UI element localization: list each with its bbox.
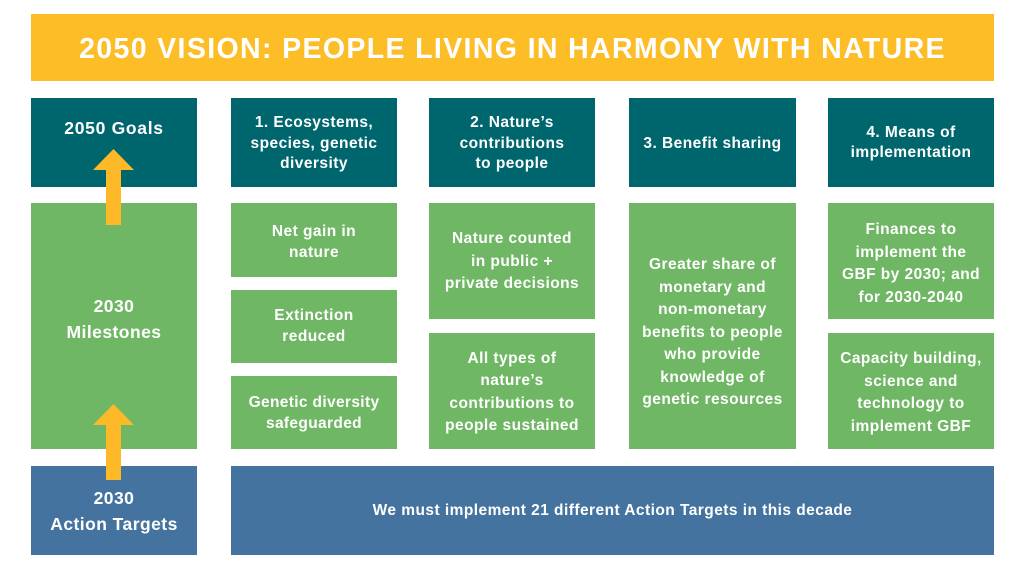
- milestone: nature counted in decisions: in public +: [471, 253, 553, 270]
- action targets statement: [231, 466, 994, 555]
- goal 1: diversity: [280, 155, 348, 172]
- row label: 2030 Milestones: [31, 203, 197, 449]
- row label: 2050 Goals: 2050 Goals: [64, 118, 164, 138]
- milestone: benefit sharing: genetic resources: [642, 391, 783, 408]
- row label: 2030 Action Targets: 2030: [94, 488, 134, 508]
- goal 4: [828, 98, 994, 187]
- arrow: targets to milestones: [93, 404, 134, 480]
- milestone: net gain in nature: nature: [289, 244, 339, 261]
- milestone: nature's contributions sustained: contributions to: [449, 394, 575, 412]
- action targets statement: We must implement 21 different Action Targets in this decade: [373, 502, 852, 519]
- milestone: extinction reduced: Extinction: [274, 307, 354, 324]
- milestone: extinction reduced: reduced: [282, 328, 346, 344]
- milestone: benefit sharing: Greater share of: [649, 256, 776, 273]
- row label: 2030 Milestones: 2030: [94, 296, 134, 316]
- milestone: finances: implement the: [856, 244, 966, 260]
- goal 1: 1. Ecosystems,: [255, 114, 373, 131]
- goal 2: to people: [476, 155, 548, 172]
- milestone: extinction reduced: [231, 290, 397, 363]
- goal 3: [629, 98, 796, 187]
- milestone: benefit sharing: benefits to people: [642, 324, 783, 341]
- row label: 2050 Goals: [31, 98, 197, 187]
- arrow: milestones to goals: [93, 149, 134, 225]
- milestone: nature counted in decisions: Nature counted: [452, 230, 572, 247]
- milestone: nature's contributions sustained: All types of: [468, 350, 556, 366]
- milestone: nature counted in decisions: private decisions: [445, 275, 579, 292]
- milestone: nature counted in decisions: [429, 203, 595, 319]
- milestone: capacity building: [828, 333, 994, 449]
- milestone: net gain in nature: [231, 203, 397, 277]
- milestone: genetic diversity safeguarded: Genetic diversity: [249, 394, 379, 411]
- milestone: capacity building: science and: [864, 372, 958, 390]
- title banner: [31, 14, 994, 81]
- row label: 2030 Milestones: Milestones: [67, 322, 161, 342]
- goal 1: species, genetic: [251, 135, 377, 152]
- milestone: nature's contributions sustained: people sustained: [445, 417, 579, 434]
- milestone: finances: for 2030-2040: [859, 288, 963, 306]
- row label: 2030 Action Targets: Action Targets: [50, 514, 178, 534]
- goal 4: implementation: [851, 144, 971, 161]
- milestone: nature's contributions sustained: [429, 333, 595, 449]
- title banner: 2050 VISION: PEOPLE LIVING IN HARMONY WITH NATURE: [79, 33, 946, 65]
- milestone: benefit sharing: [629, 203, 796, 449]
- milestone: genetic diversity safeguarded: safeguarded: [266, 414, 362, 432]
- goal 3: 3. Benefit sharing: [643, 135, 782, 152]
- row label: 2030 Action Targets: [31, 466, 197, 555]
- milestone: benefit sharing: who provide: [664, 346, 761, 363]
- milestone: benefit sharing: non-monetary: [658, 301, 767, 318]
- milestone: capacity building: technology to: [857, 395, 965, 412]
- milestone: capacity building: Capacity building,: [840, 350, 982, 367]
- milestone: capacity building: implement GBF: [851, 418, 971, 434]
- milestone: benefit sharing: monetary and: [659, 279, 766, 296]
- milestone: finances: Finances to: [865, 221, 957, 238]
- milestone: net gain in nature: Net gain in: [272, 223, 356, 240]
- milestone: finances: GBF by 2030; and: [842, 266, 980, 283]
- goal 2: 2. Nature’s: [470, 114, 554, 131]
- milestone: benefit sharing: knowledge of: [660, 369, 765, 386]
- goal 1: [231, 98, 397, 187]
- milestone: finances: [828, 203, 994, 319]
- milestone: genetic diversity safeguarded: [231, 376, 397, 449]
- goal 4: 4. Means of: [866, 124, 956, 140]
- goal 2: contributions: [460, 135, 564, 152]
- goal 2: [429, 98, 595, 187]
- milestone: nature's contributions sustained: nature’s: [480, 372, 544, 389]
